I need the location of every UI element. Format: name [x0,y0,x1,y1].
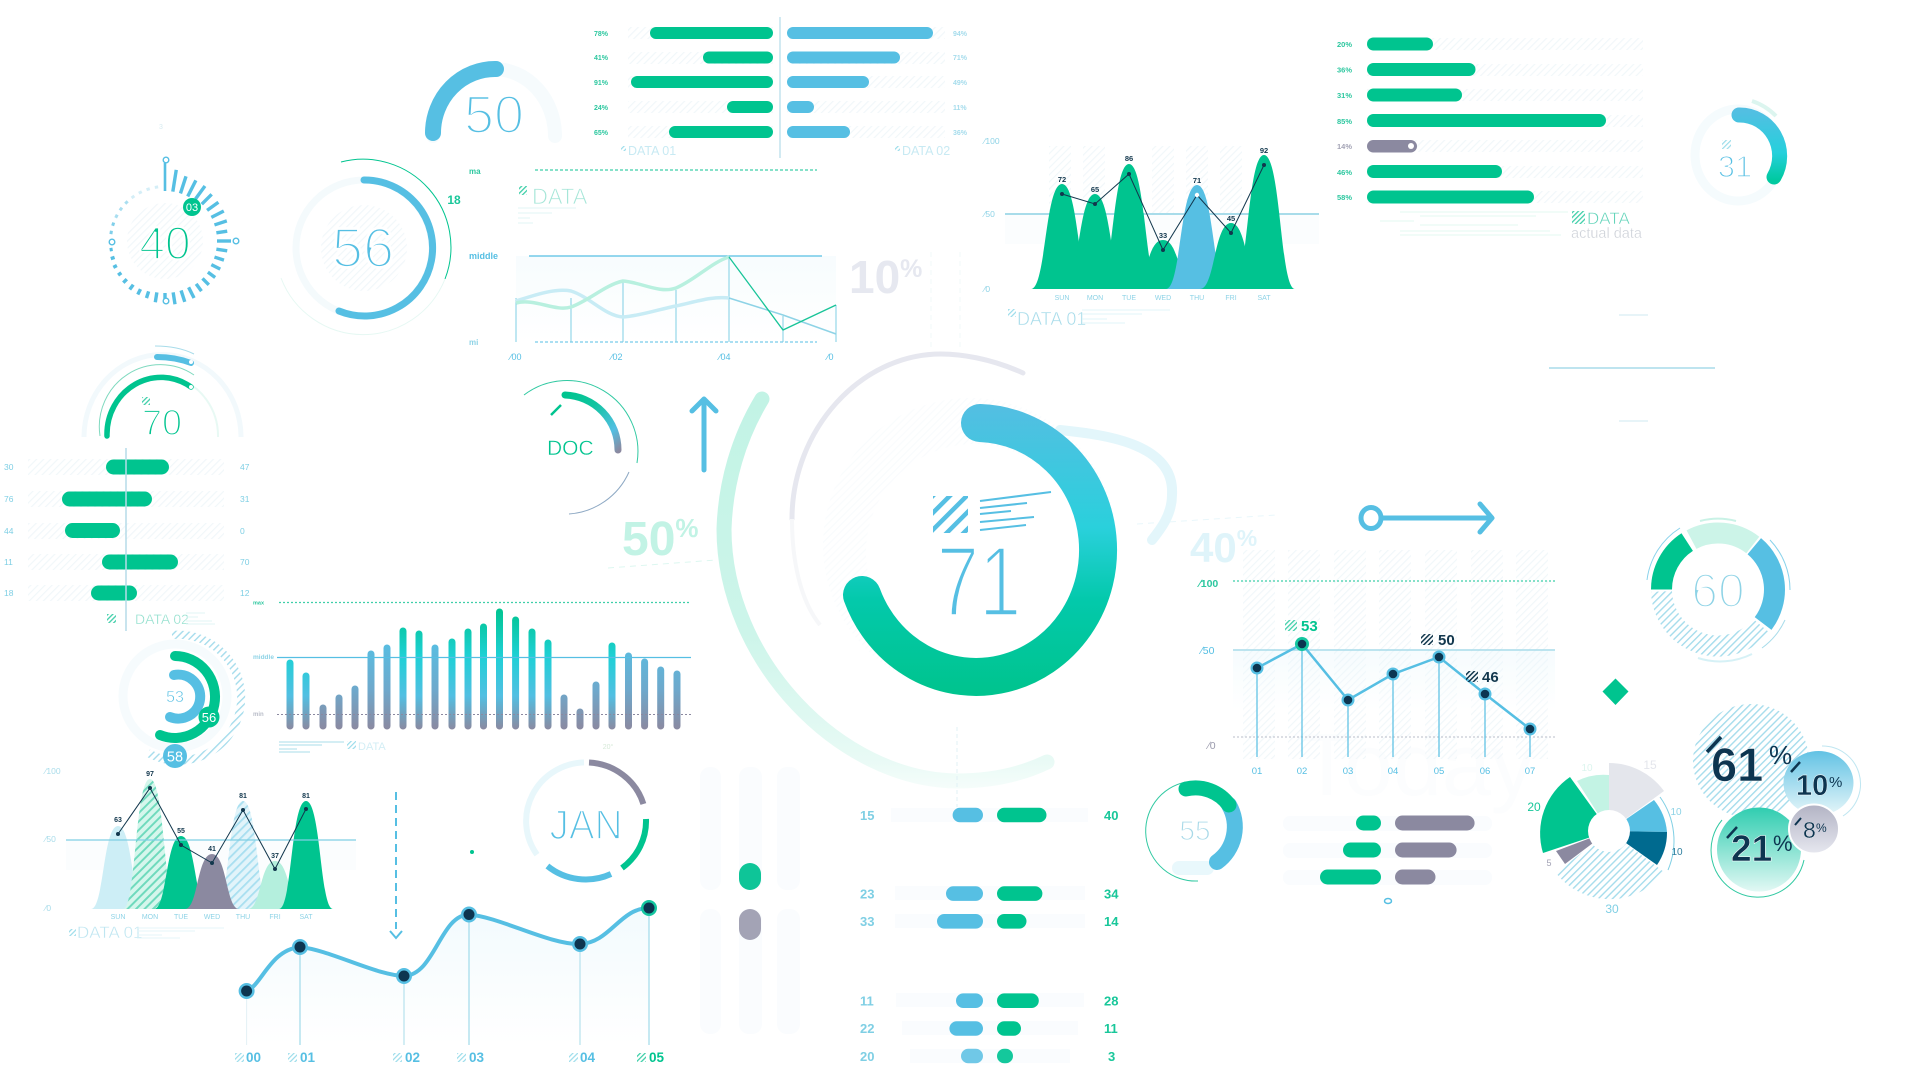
curved line chart: 00-05: 03 [469,1050,485,1065]
line chart: 01-07: 05 [1434,766,1444,777]
top diverging bar chart [594,17,968,158]
vertical pill tracks [700,767,800,1034]
line chart: ma / middle / mi: ma [469,167,481,176]
big label: 40%: % [1237,525,1257,551]
area chart: DATA 01 top right: ∕0 [982,284,990,294]
top diverging bar chart: 91% [594,80,609,87]
center diverging bars: 34 [1104,886,1119,902]
top diverging bar chart: 78% [594,31,609,38]
big label: 40% [1137,515,1276,571]
center diverging bars: 3 [1108,1049,1115,1064]
area chart: DATA 01 top right: FRI [1225,295,1237,302]
gauge: 70: 70 [142,402,182,443]
area chart: DATA 01 top right: SAT [1257,295,1271,302]
line chart: ma / middle / mi: ∕02 [609,352,623,362]
area chart: DATA 01 bottom left: 81 [302,793,310,800]
area chart: DATA 01 bottom left: MON [142,914,158,921]
left diverging bar chart [4,448,250,631]
center diverging bars: 11 [860,994,874,1008]
left diverging bar chart: 30 [4,462,14,472]
horizontal bar chart: top right: 58% [1337,193,1352,202]
area chart: DATA 01 bottom left: ∕100 [43,766,61,776]
top diverging bar chart: 65% [594,130,609,137]
bar chart: 25 bars: max [253,600,265,606]
gauge: 50: 50 [464,85,524,145]
top diverging bar chart: 41% [594,55,609,62]
line chart: ma / middle / mi: ∕0 [825,352,834,362]
center diverging bars: 14 [1104,914,1119,929]
center diverging bars: 40 [1104,808,1118,823]
top diverging bar chart: 36% [953,130,968,137]
area chart: DATA 01 bottom left: 55 [177,828,185,835]
big label: 50%: % [675,513,699,543]
line chart: ma / middle / mi: mi [469,338,478,347]
area chart: DATA 01 bottom left: WED [204,914,220,921]
area chart: DATA 01 top right: 45 [1227,214,1235,223]
dashed arrow: down [390,792,402,938]
left diverging bar chart: 44 [4,526,14,536]
gauge: 31: 31 [1718,149,1752,184]
gauge: 53 / 56 / 58: 53 [166,689,184,706]
line chart: 01-07: ∕100 [1197,578,1218,590]
horizontal bar chart: top right: DATA [1587,209,1630,228]
big label: 10% [849,251,960,350]
big label: 50%: 50 [622,513,675,566]
pie chart: 10 [1670,807,1682,818]
big label: 50% [608,513,716,568]
center diverging bars: 20 [860,1049,874,1064]
gauge: 50 [433,69,555,145]
horizontal bar chart: top right: 31% [1337,91,1352,100]
area chart: DATA 01 bottom left: SAT [299,914,313,921]
gauge: JAN: JAN [550,800,622,848]
gauge: JAN [470,743,646,879]
bar chart: 25 bars [253,600,691,753]
curved line chart: 00-05 [235,900,665,1065]
center diverging bars: 33 [860,914,874,929]
curved line chart: 00-05: 04 [580,1050,596,1065]
horizontal bar chart: top right: 85% [1337,117,1352,126]
top diverging bar chart: 94% [953,31,968,38]
top diverging bar chart: 11% [953,105,967,112]
area chart: DATA 01 top right: ∕100 [982,136,1000,146]
pie chart: 10 [1671,847,1683,858]
gauge: 70 [84,346,241,443]
line chart: 01-07: ∕50 [1198,645,1215,657]
top diverging bar chart: 49% [953,80,968,87]
bubble stats: 61 [1711,738,1763,791]
center diverging bars: 15 [860,808,874,823]
gauge: 60 [1647,519,1790,661]
big label: 10%: % [900,255,922,283]
area chart: DATA 01 bottom left: 97 [146,771,154,778]
area chart: DATA 01 bottom left: 41 [208,846,216,853]
area chart: DATA 01 bottom left: 37 [271,853,279,860]
bubble stats: 8 [1803,817,1816,843]
left diverging bar chart: 47 [240,462,250,472]
line chart: 01-07: 04 [1388,766,1398,777]
left diverging bar chart: 18 [4,588,14,598]
bubble stats: 21 [1731,828,1772,869]
horizontal bar chart: top right [1337,38,1643,242]
bar chart: 25 bars: DATA [358,741,386,753]
small faint tick label: 3 [159,124,163,131]
gauge: DOC: DOC [547,437,594,460]
central donut gauge: 71 [724,354,1172,807]
area chart: DATA 01 bottom left: FRI [269,914,281,921]
gauge: 55: 55 [1179,815,1211,846]
line chart: 01-07 [1197,550,1555,777]
area chart: DATA 01 bottom left: 81 [239,793,247,800]
center diverging bars: 11 [1104,1021,1118,1036]
bars: green and grey [1283,816,1492,904]
area chart: DATA 01 top right: 86 [1125,154,1133,163]
area chart: DATA 01 top right: 65 [1091,185,1099,194]
line chart: 01-07: ∕0 [1205,740,1216,752]
center diverging bars: 22 [860,1021,874,1036]
line chart: 01-07: 50 [1438,632,1455,649]
up arrow [692,399,716,470]
bubble stats: 10 [1796,770,1828,802]
area chart: DATA 01 bottom left [43,766,356,942]
gauge: JAN: 20° [603,743,613,751]
line chart: 01-07: 01 [1252,766,1262,777]
area chart: DATA 01 bottom left: 63 [114,817,122,824]
gauge: 53 / 56 / 58: 58 [167,750,183,766]
line chart: 01-07: 03 [1343,766,1353,777]
horizontal bar chart: top right: actual data [1571,226,1643,242]
horizontal bar chart: top right: 46% [1337,168,1352,177]
center diverging bars: 23 [860,886,874,902]
bar chart: 25 bars: middle [253,654,274,661]
area chart: DATA 01 top right: THU [1190,295,1204,302]
area chart: DATA 01 top right: TUE [1122,295,1136,302]
line chart: 01-07: 46 [1482,669,1499,686]
gauge: 40 with ticks [109,157,239,304]
bubble stats [1693,704,1861,897]
gauge: DOC [524,381,638,514]
gauge: 31 [1695,101,1781,201]
line chart: ma / middle / mi: middle [469,251,498,261]
horizontal bar chart: top right: 20% [1337,40,1352,49]
faint watermark: Today: Today [1300,715,1535,814]
gauge: 40 with ticks: 03 [186,202,198,214]
big label: 10%: 10 [849,251,900,303]
area chart: DATA 01 bottom left: TUE [174,914,188,921]
line chart: 01-07: 53 [1301,618,1318,635]
gauge: 40 with ticks: 40 [139,217,191,269]
curved line chart: 00-05: 02 [405,1050,420,1065]
center diverging bars [860,808,1119,1064]
pie chart: 20 [1527,800,1541,814]
line chart: ma / middle / mi: ∕00 [508,352,522,362]
line chart: 01-07: 02 [1297,766,1307,777]
horizontal bar chart: top right: 14% [1337,142,1352,151]
decorative data lines right [1549,315,1715,421]
bubble stats: % [1773,831,1793,856]
gauge: 56 [281,159,461,335]
area chart: DATA 01 top right: 92 [1260,146,1268,155]
area chart: DATA 01 top right: MON [1087,295,1103,302]
curved line chart: 00-05: 00 [246,1050,261,1065]
big label: 40%: 40 [1190,524,1237,571]
curved line chart: 00-05: 05 [649,1050,665,1065]
top diverging bar chart: 71% [953,55,968,62]
left diverging bar chart: 70 [240,557,250,567]
left diverging bar chart: 0 [240,526,245,536]
left diverging bar chart: DATA 02 [135,611,189,627]
area chart: DATA 01 bottom left: THU [236,914,250,921]
pie chart: 10 [1581,763,1593,774]
pie chart [1527,758,1683,916]
line chart: 01-07: 06 [1480,766,1490,777]
bubble stats: % [1829,774,1842,791]
central donut gauge: 71: 71 [937,526,1021,637]
left diverging bar chart: 12 [240,588,250,598]
line chart: ma / middle / mi: ∕04 [717,352,731,362]
area chart: DATA 01 top right [982,136,1319,329]
top diverging bar chart: 24% [594,105,609,112]
line chart: ma / middle / mi: DATA [532,184,588,209]
center diverging bars: 28 [1104,994,1118,1008]
area chart: DATA 01 top right: 71 [1193,176,1201,185]
area chart: DATA 01 bottom left: ∕50 [43,834,56,844]
gauge: 53 / 56 / 58 [123,635,241,768]
area chart: DATA 01 bottom left: DATA 01 [77,923,143,942]
area chart: DATA 01 top right: 72 [1058,175,1066,184]
area chart: DATA 01 top right: SUN [1055,295,1069,302]
top diverging bar chart: DATA 01 [628,144,676,158]
line chart: ma / middle / mi [469,167,836,362]
area chart: DATA 01 top right: DATA 01 [1017,309,1086,329]
bubble stats: % [1816,821,1827,835]
pie chart: 5 [1546,858,1552,868]
arrow: right [1361,504,1492,532]
line chart: 01-07: 07 [1525,766,1535,777]
bubble stats: % [1769,740,1792,770]
area chart: DATA 01 bottom left: SUN [111,914,125,921]
pie chart: 30 [1605,902,1619,916]
gauge: 55 [1146,782,1235,881]
left diverging bar chart: 31 [240,494,250,504]
left diverging bar chart: 11 [4,557,13,567]
curved line chart: 00-05: 01 [300,1050,316,1065]
gauge: 60: 60 [1691,565,1745,618]
area chart: DATA 01 bottom left: ∕0 [43,903,51,913]
area chart: DATA 01 top right: 33 [1159,231,1167,240]
area chart: DATA 01 top right: ∕50 [982,209,995,219]
gauge: 56: 56 [332,216,394,279]
gauge: 56: 18 [447,193,461,207]
horizontal bar chart: top right: 36% [1337,66,1352,74]
bar chart: 25 bars: min [253,712,264,718]
icon: diamond [1602,678,1628,705]
gauge: 53 / 56 / 58: 56 [202,710,216,725]
top diverging bar chart: DATA 02 [902,144,950,158]
left diverging bar chart: 76 [4,494,14,504]
pie chart: 15 [1643,758,1657,772]
area chart: DATA 01 top right: WED [1155,295,1171,302]
